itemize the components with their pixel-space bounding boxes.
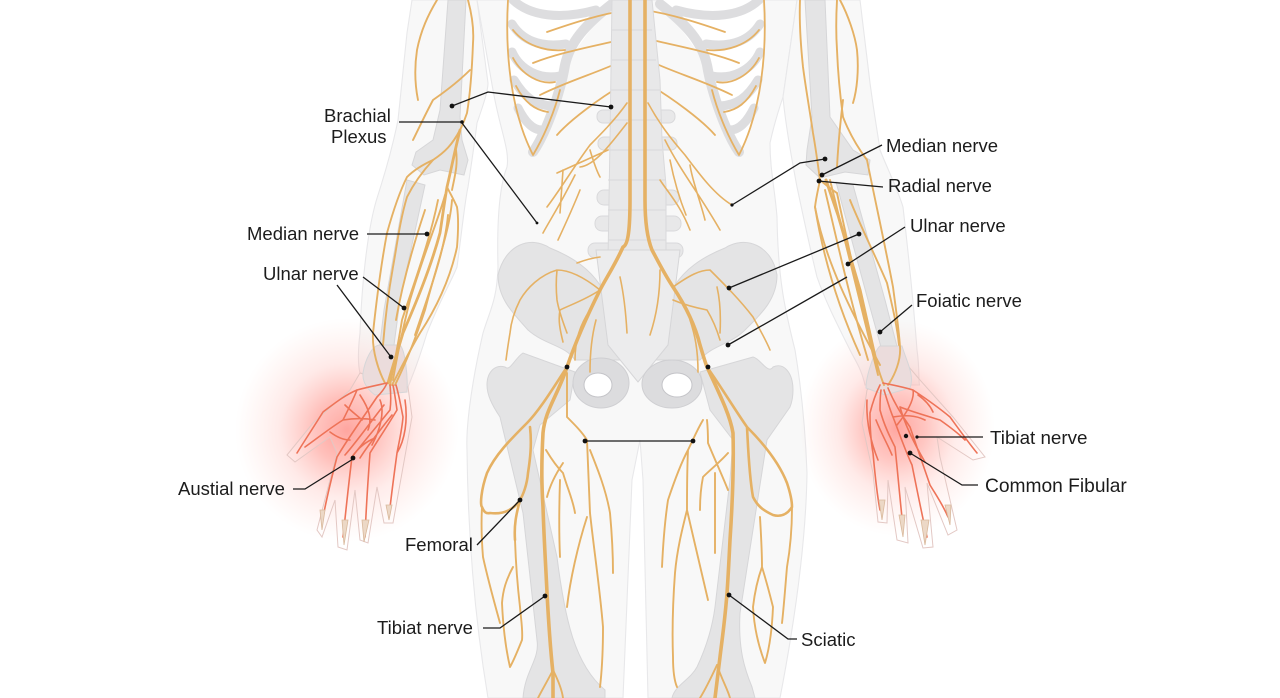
arm bones: right — [805, 0, 911, 395]
labels: Radial nerve — [888, 175, 992, 196]
hand outline: left — [287, 373, 412, 550]
nerves: left arm — [373, 0, 473, 385]
body silhouette — [358, 0, 920, 698]
arm bones: left — [363, 0, 468, 395]
labels: Ulnar nerve — [910, 215, 1006, 236]
labels: Brachial — [324, 105, 391, 126]
nerves: thigh branches — [481, 367, 792, 540]
labels: Median nerve — [886, 135, 998, 156]
leader dots — [351, 104, 919, 598]
labels: Femoral — [405, 534, 473, 555]
femurs — [487, 353, 793, 698]
labels: Tibiat nerve — [990, 427, 1087, 448]
red glow: right hand — [799, 320, 995, 536]
pelvic rings — [573, 358, 702, 408]
finger bones: left — [320, 505, 392, 545]
rib cage: right — [644, 0, 765, 155]
nerves: thoracic and pelvic fans — [506, 103, 770, 372]
hand outline: right — [862, 360, 985, 548]
labels: Tibiat nerve — [377, 617, 473, 638]
labels: Common Fibular — [985, 476, 1127, 497]
labels: Median nerve — [247, 223, 359, 244]
labels: Austial nerve — [178, 478, 285, 499]
spine — [588, 0, 683, 260]
finger bones: right — [879, 500, 951, 545]
labels — [178, 105, 1127, 650]
nerves: right arm — [800, 0, 900, 385]
nerves: spine trunk and sciatic — [542, 0, 733, 698]
pelvis — [498, 242, 777, 382]
nerves: left hand — [297, 383, 406, 537]
labels: Ulnar nerve — [263, 263, 359, 284]
nerves: right hand — [867, 383, 977, 537]
labels: Foiatic nerve — [916, 290, 1022, 311]
leader lines — [293, 92, 983, 639]
rib cage: left — [507, 0, 628, 155]
red glow: left hand — [235, 318, 459, 542]
labels: Sciatic — [801, 629, 856, 650]
labels: Plexus — [331, 126, 387, 147]
